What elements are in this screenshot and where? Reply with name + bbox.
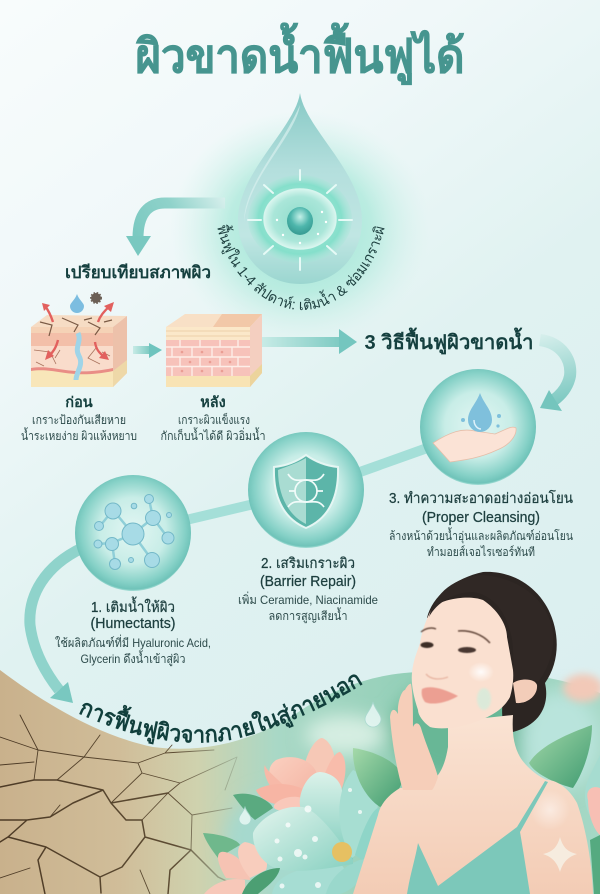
icon: central water drop [238,93,362,284]
icon: molecule [94,494,174,570]
ground and mint meadow [0,670,600,894]
title: ผิวขาดน้ำฟื้นฟูได้ [135,22,464,85]
step 3 text: ทำมอยส์เจอไรเซอร์ทันที [427,545,535,559]
leaf bottom [242,868,280,894]
after label: กักเก็บน้ำได้ดี ผิวอิ่มน้ำ [160,427,266,443]
step 3 text: ล้างหน้าด้วยน้ำอุ่นและผลิตภัณฑ์อ่อนโยน [389,527,573,544]
hair back [427,572,557,732]
connector lines [186,447,430,520]
curved caption: การฟื้นฟูผิวจากภายในสู่ภายนอก [79,674,362,744]
step 3 text [389,489,573,559]
nose [426,674,448,679]
shoulder highlight [530,790,570,830]
body and neck [353,715,593,894]
eyes and brows [420,628,490,653]
arrow: drop to comparison [126,203,225,256]
dress [407,781,548,894]
hair front [429,575,553,685]
before label: น้ำระเหยง่าย ผิวแห้งหยาบ [21,427,137,443]
blurred pink flower [563,674,600,702]
leaf right of arm [590,835,600,894]
loss arrows [45,306,110,357]
step 1 text: (Humectants) [90,616,176,632]
step 1 text [55,596,211,667]
step 1 bubble [75,475,191,591]
drop inner ring [264,189,336,249]
leaf near hand [353,748,403,807]
skin block: before [31,293,127,387]
before label: ก่อน [65,395,93,411]
step 3 bubble [420,369,536,485]
after label: เกราะผิวแข็งแรง [178,412,250,427]
cheek shimmer [468,662,494,682]
before label [21,395,137,443]
icon: hand and drop [433,393,516,462]
sparkle [543,837,577,872]
soil cracks [0,715,237,894]
after label [160,395,266,443]
long arrow to methods [262,329,357,354]
step 2 text: 2. เสริมเกราะผิว [261,556,355,572]
ear [513,679,537,703]
icon: drop [70,294,84,313]
step 3 text: (Proper Cleansing) [422,510,540,526]
pink flower behind [256,738,345,815]
skin block: after [166,314,262,387]
step 2 text: เพิ่ม Ceramide, Niacinamide [238,591,378,607]
step 2 text [238,556,378,624]
pink flower right [587,787,600,835]
step 2 text: (Barrier Repair) [260,574,356,590]
after label: หลัง [200,395,226,411]
arrow from step 1 to caption [30,548,82,703]
heading: comparison: เปรียบเทียบสภาพผิว [65,262,211,282]
before label: เกราะป้องกันเสียหาย [32,413,126,427]
step 2 text: ลดการสูญเสียน้ำ [268,607,348,624]
step 1 text: 1. เติมน้ำให้ผิว [91,596,175,616]
flower stamen [332,842,352,862]
drop nucleus [287,207,313,235]
heading: 3 ways: 3 วิธีฟื้นฟูผิวขาดน้ำ [364,327,534,356]
step 3 text: 3. ทำความสะอาดอย่างอ่อนโยน [389,489,573,507]
mint flower [253,770,380,894]
step 2 bubble [248,432,364,548]
small leaves [233,794,273,820]
blurred meadow shapes [225,680,600,890]
small arrow [133,343,162,358]
face [412,598,513,728]
drop glow [170,110,430,346]
floating droplets [239,702,381,825]
icon: sun damage [91,293,101,303]
woman [353,572,593,894]
bottom scene [0,670,600,894]
drop outer ring [248,175,352,263]
icon: shield [274,455,338,528]
hand [390,684,438,790]
curved arrow to step 3 [540,340,570,411]
moisture leak [76,333,81,380]
pink flower lower left [204,842,267,894]
leaf right [529,725,592,788]
step 1 text: Glycerin ดึงน้ำเข้าสู่ผิว [80,650,186,667]
step 1 text: ใช้ผลิตภัณฑ์ที่มี Hyaluronic Acid, [55,634,211,650]
lips [422,687,458,704]
